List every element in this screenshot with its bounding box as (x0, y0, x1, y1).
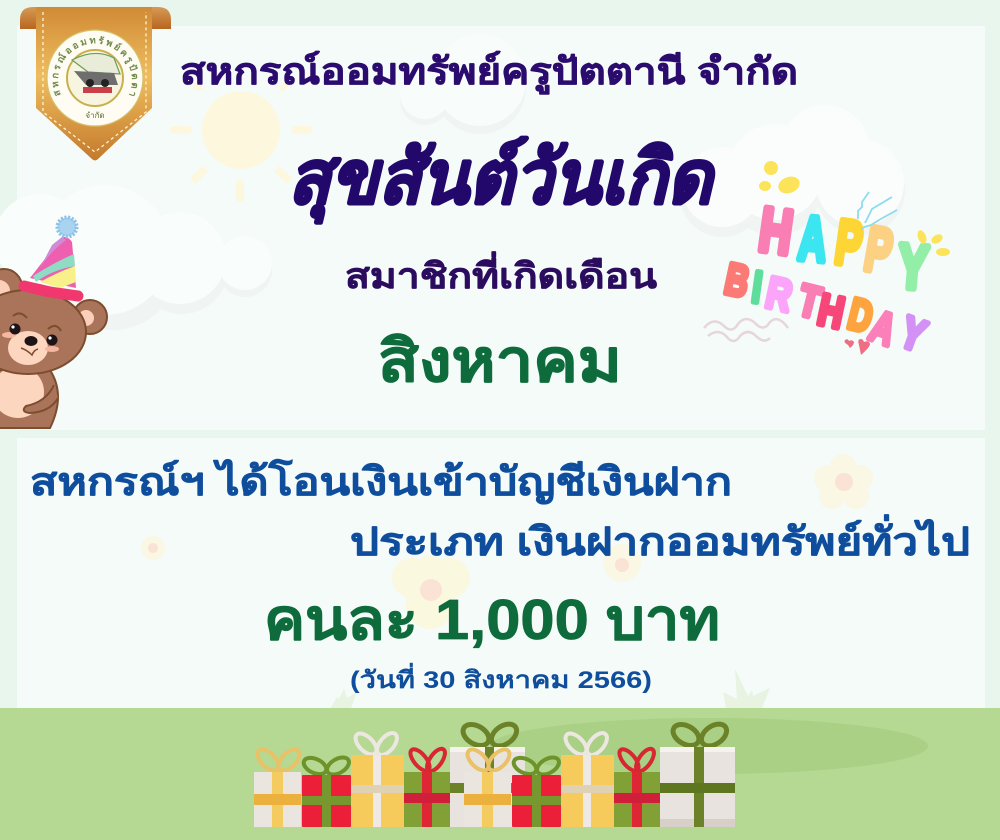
date: (วันที่ 30 สิงหาคม 2566) (350, 662, 652, 694)
hat (30, 218, 76, 288)
seal: จำกัด (85, 111, 105, 120)
body text line 1: สหกรณ์ฯ ได้โอนเงินเข้าบัญชีเงินฝาก (30, 459, 732, 505)
happy birthday lettering: A (796, 203, 830, 274)
flowers (141, 454, 873, 629)
bear with party hat (0, 218, 107, 428)
gift: green 1 (404, 746, 450, 827)
happy birthday lettering: Y (894, 307, 932, 361)
ground hill (490, 718, 928, 774)
happy birthday lettering: P (860, 213, 897, 286)
body text line 2: ประเภท เงินฝากออมทรัพย์ทั่วไป (350, 514, 970, 564)
cloud: left (0, 185, 272, 330)
gift: large white front (660, 720, 735, 827)
happy birthday lettering: T (793, 276, 826, 328)
gift: red 1 (301, 754, 352, 827)
happy birthday lettering: P (831, 206, 867, 279)
happy birthday lettering: H (814, 285, 848, 338)
panel: top (17, 26, 985, 430)
ground (0, 708, 1000, 840)
doodles around lettering (704, 161, 950, 355)
amount per person: คนละ 1,000 บาท (264, 588, 720, 652)
gift: red 2 (511, 754, 562, 827)
heading: organisation name: สหกรณ์ออมทรัพย์ครูปัตตานี จำกัด (180, 51, 798, 95)
happy birthday lettering: H (755, 195, 797, 268)
gift: cream 1 (254, 746, 303, 827)
title: happy birthday in Thai: สุขสันต์วันเกิด (288, 136, 716, 224)
happy birthday lettering (721, 195, 932, 361)
happy birthday lettering: B (721, 254, 753, 307)
happy birthday lettering: R (762, 268, 796, 321)
happy birthday lettering: I (749, 263, 765, 313)
cloud: middle (400, 34, 526, 134)
gifts row (254, 720, 735, 827)
grass tufts (330, 669, 770, 708)
month name: สิงหาคม (378, 329, 622, 394)
seal (46, 29, 144, 127)
happy birthday lettering: Y (895, 232, 931, 303)
gift: cream 2 (464, 746, 513, 827)
gift: yellow 1 (351, 730, 404, 827)
happy birthday lettering: D (843, 289, 878, 343)
cloud: right (680, 105, 905, 237)
panel: bottom (17, 438, 985, 708)
hat trim (24, 286, 78, 296)
gift: yellow 2 (561, 730, 614, 827)
gift: green 2 (614, 746, 660, 827)
bear head (0, 290, 86, 374)
bear body (0, 370, 58, 428)
subheading: members born in month: สมาชิกที่เกิดเดือน (345, 251, 657, 296)
logo ribbon (20, 7, 171, 160)
happy birthday lettering: A (864, 301, 902, 356)
gift: large white back (450, 720, 525, 827)
sun (170, 82, 312, 202)
